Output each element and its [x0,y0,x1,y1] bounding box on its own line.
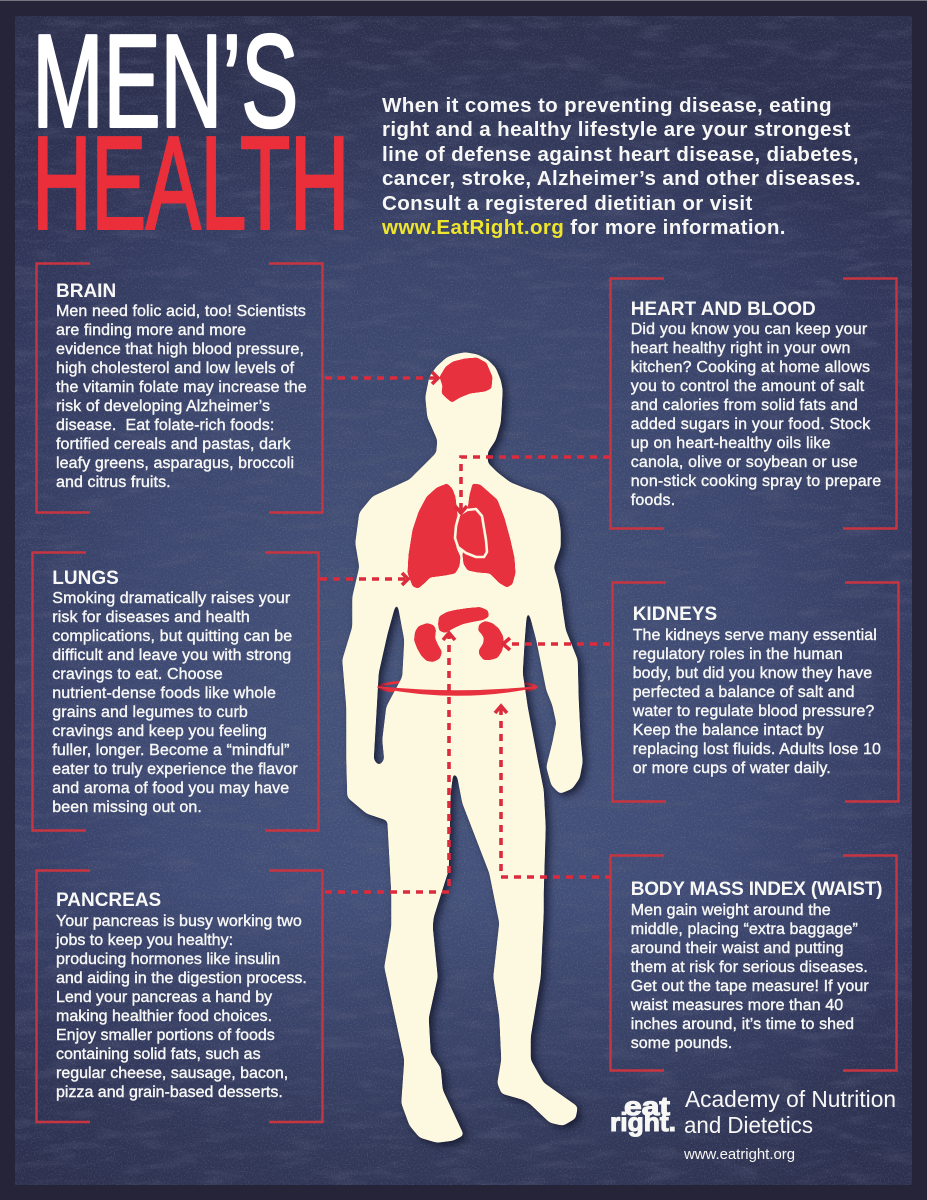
text: brain [56,303,307,491]
text: heart and blood: added sugars in your food. Stock [631,416,870,433]
text: brain: are finding more and more [56,322,246,339]
title: Men's Health: HEALTH [32,110,349,256]
text: kidneys: body, but did you know they have [633,665,872,682]
arrow: heart [455,457,610,513]
text: body mass index: middle, placing “extra baggage” [631,921,858,938]
heading: brain: BRAIN [56,281,116,302]
organ: left lung [408,484,460,588]
text: brain: high cholesterol and low levels of [56,360,294,377]
arrow: kidneys [503,638,610,650]
text: body mass index: around their waist and putting [631,940,844,957]
text: brain: Men need folic acid, too! Scientists [56,303,306,320]
panel: kidneys [611,581,900,803]
waist band back [378,680,536,694]
text: pancreas: Your pancreas is busy working two [56,913,302,930]
text: heart and blood: Did you know you can keep your [631,321,867,338]
text: heart and blood: up on heart-healthy oils like [631,435,831,452]
heading: kidneys: KIDNEYS [633,604,717,625]
text: heart and blood: kitchen? Cooking at home allows [631,359,870,376]
intro text block: When it comes to preventing disease, eating [382,94,832,116]
text: kidneys: replacing lost fluids. Adults lose 10 [633,741,881,758]
text: body mass index: Men gain weight around the [631,902,831,919]
intro text block [382,94,861,239]
text: pancreas: Enjoy smaller portions of foods [56,1027,275,1044]
text: lungs: complications, but quitting can be [52,628,292,645]
title: Men's Health: MEN’S [32,8,298,154]
arrow: lungs [320,573,408,585]
text: lungs: been missing out on. [52,799,202,816]
text: body mass index: Get out the tape measure! If your [631,978,869,995]
text: lungs: grains and legumes to curb [52,704,248,721]
arrow: waist [495,706,612,877]
text: heart and blood: heart healthy right in your own [631,340,851,357]
text: pancreas: containing solid fats, such as [56,1046,261,1063]
text: brain: leafy greens, asparagus, broccoli [56,455,294,472]
text: body mass index [630,902,869,1052]
text: kidneys: regulatory roles in the human [633,646,843,663]
intro text block: www.EatRight.org for more information. [382,216,786,239]
organ: brain [440,358,492,402]
text: heart and blood: non-stick cooking spray to prepare [631,473,881,490]
text: pancreas [55,913,307,1101]
text: pancreas: and aiding in the digestion process. [56,970,307,987]
panel: lungs [31,551,320,832]
text: pancreas: making healthier food choices. [56,1008,272,1025]
text: heart and blood: you to control the amount of salt [631,378,864,395]
heading: heart and blood: HEART AND BLOOD [631,298,816,320]
text: lungs: and aroma of food you may have [52,780,289,797]
text: pancreas: regular cheese, sausage, bacon, [56,1065,288,1082]
organ: heart [455,509,487,557]
organ: left kidney [415,624,441,661]
text: kidneys: Keep the balance intact by [633,722,824,739]
academy name [684,1086,896,1138]
text: lungs: cravings and keep you feeling [52,723,267,740]
heading: pancreas: PANCREAS [56,890,161,911]
text: lungs: fuller, longer. Become a “mindful” [52,742,290,759]
text: brain: risk of developing Alzheimer’s [56,398,270,415]
organ: right lung [463,484,515,587]
organ: right kidney [479,622,503,659]
text: pancreas: pizza and grain-based desserts. [56,1084,283,1101]
text: kidneys: The kidneys serve many essential [633,627,877,644]
silhouette [343,353,582,1142]
text: pancreas: Lend your pancreas a hand by [56,989,272,1006]
logo mark: eat right: eat [624,1091,670,1121]
text: kidneys: perfected a balance of salt and [633,684,855,701]
panel: brain [35,262,324,514]
logo mark: eat right: right. [610,1107,676,1137]
intro text block: cancer, stroke, Alzheimer’s and other diseases. [382,167,861,190]
waist band front [378,687,536,695]
text: pancreas: producing hormones like insulin [56,951,280,968]
text: lungs [52,590,298,816]
text: lungs: difficult and leave you with strong [52,647,291,664]
title: Men's Health [32,8,349,256]
arrow: pancreas [325,633,455,892]
text: heart and blood [630,321,881,509]
intro text block: right and a healthy lifestyle are your strongest [382,118,851,141]
intro text block: line of defense against heart disease, diabetes, [382,142,859,166]
text: brain: disease. Eat folate-rich foods: [56,417,274,434]
intro text block: Consult a registered dietitian or visit [382,192,753,214]
text: heart and blood: foods. [631,492,675,509]
text: brain: evidence that high blood pressure, [56,341,304,358]
text: lungs: nutrient-dense foods like whole [52,685,276,702]
panel: heart and blood [609,277,898,530]
heading: body mass index: BODY MASS INDEX (WAIST) [631,879,882,900]
text: body mass index: waist measures more than 40 [631,997,843,1014]
text: heart and blood: and calories from solid fats and [631,397,858,414]
text: body mass index: inches around, it’s time to shed [631,1016,854,1033]
panel: pancreas [35,869,324,1124]
academy name: Academy of Nutrition [685,1086,896,1112]
logo mark: eat right [610,1091,676,1137]
panel: body mass index [609,854,898,1072]
academy name: and Dietetics [684,1112,813,1138]
organ: pancreas [439,608,488,632]
text: kidneys: or more cups of water daily. [633,760,831,777]
text: kidneys: water to regulate blood pressure? [633,703,874,720]
text: heart and blood: canola, olive or soybean or use [631,454,858,471]
text: lungs: cravings to eat. Choose [52,666,223,683]
text: lungs: Smoking dramatically raises your [52,590,290,607]
text: brain: fortified cereals and pastas, dark [56,436,291,453]
text: body mass index: some pounds. [631,1035,732,1052]
heading: lungs: LUNGS [52,568,119,588]
text: body mass index: them at risk for serious diseases. [631,959,868,976]
arrow: brain [325,372,438,384]
text: brain: the vitamin folate may increase the [56,379,307,396]
website url: www.eatright.org [683,1147,795,1163]
text: pancreas: jobs to keep you healthy: [56,932,233,949]
text: brain: and citrus fruits. [56,474,171,491]
text: kidneys [632,627,881,777]
text: lungs: risk for diseases and health [52,609,250,626]
text: lungs: eater to truly experience the flavor [52,761,298,778]
